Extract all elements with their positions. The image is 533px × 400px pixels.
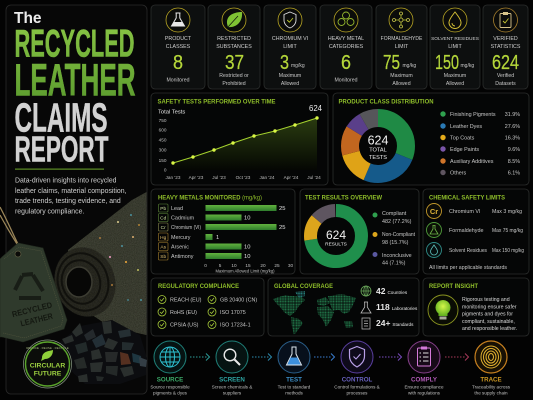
legend — [372, 211, 415, 266]
bar values: 10 — [244, 245, 250, 251]
step: comply — [404, 341, 444, 396]
panel: safety tests over time: Total Tests — [158, 110, 185, 116]
legend: 27.6% — [505, 124, 520, 130]
stat card: formaldehyde limit: LIMIT — [395, 44, 409, 50]
insight text: and responsible leather. — [462, 326, 517, 332]
accent rule — [15, 169, 104, 170]
metal element badges — [158, 204, 168, 260]
panel: heavy metals monitored — [151, 189, 295, 274]
step: screen — [212, 341, 252, 396]
icon: molecule hexagons — [334, 8, 358, 32]
legend: 9.6% — [508, 147, 520, 153]
icon: checklist — [408, 341, 440, 373]
x axis labels: Apr '23 — [189, 175, 204, 180]
icon: globe — [154, 341, 186, 373]
arrow: screen to test — [252, 354, 272, 360]
description text: leather claims, material composition, — [15, 188, 127, 195]
metal element badges: As — [160, 244, 167, 250]
icon: flask — [166, 8, 190, 32]
axis labels — [204, 263, 293, 274]
limit rows: Max 75 mg/kg — [492, 228, 523, 234]
stat card: restricted substances: RESTRICTED — [217, 36, 251, 42]
icon: document — [362, 318, 370, 329]
metal names: Lead — [171, 206, 183, 212]
stat card: solvent residues limit: Maximum — [444, 73, 466, 79]
badge: circular future: REDUCE · REUSE · RECYCLE — [26, 346, 69, 350]
icon: light bulb — [428, 295, 458, 325]
legend: Non-Compliant — [382, 232, 415, 238]
stat card: chromium VI limit: mg/kg — [291, 63, 305, 69]
stat card: chromium VI limit: Maximum — [279, 73, 301, 79]
arrow: control to comply — [379, 354, 402, 360]
donut center label: TESTS — [369, 155, 387, 161]
bar values: 10 — [244, 216, 250, 222]
bar values: 25 — [279, 206, 285, 212]
insight text: monitoring ensure safer — [462, 304, 517, 310]
legend: 98 (15.7%) — [382, 240, 409, 246]
metal names: Mercury — [171, 235, 191, 241]
metal element badges: Hg — [160, 235, 167, 241]
standards list — [170, 298, 257, 328]
stat: countries: 42 — [376, 286, 386, 296]
stat card: product classes: CLASSES — [166, 44, 191, 50]
panel: chemical safety limits: CHEMICAL SAFETY LIMITS — [429, 194, 505, 202]
standards list: GB 20400 (CN) — [220, 298, 257, 304]
axis labels: 20 — [260, 263, 266, 268]
stat card: verified statistics: 624 — [492, 52, 519, 74]
standards list: ISO 17075 — [220, 310, 246, 316]
stat card: solvent residues limit: 150 — [435, 52, 459, 74]
title: The: The — [14, 10, 42, 27]
stat card: restricted substances — [208, 5, 260, 89]
step: comply: COMPLY — [411, 376, 438, 384]
metal element badges: Sb — [160, 254, 166, 260]
step: screen: Screen chemicals & — [212, 384, 252, 390]
icon: fingerprint — [475, 341, 507, 373]
stat: laboratories: 118 — [376, 302, 390, 312]
step: test: Test to standard — [278, 384, 311, 390]
x axis labels: Jan '24 — [260, 175, 275, 180]
world map — [273, 291, 356, 335]
step: trace: TRACE — [480, 376, 502, 384]
x axis labels: Jan '23 — [166, 175, 181, 180]
stat: standards: Standards — [392, 322, 414, 327]
legend: Leather Dyes — [450, 124, 482, 130]
legend: 16.3% — [505, 136, 520, 142]
step: source: SOURCE — [157, 376, 183, 384]
stat card: chromium VI limit: Allowed — [281, 81, 299, 87]
icon: formaldehyde flask — [426, 222, 442, 238]
stat card: product classes — [151, 5, 205, 89]
stat card: restricted substances: 37 — [225, 52, 244, 74]
stat card: chromium VI limit: LIMIT — [283, 44, 298, 50]
step: source — [150, 341, 190, 396]
stat card: verified statistics: STATISTICS — [491, 44, 521, 50]
stat: countries: Countries — [387, 290, 408, 295]
step: test: methods — [285, 390, 304, 396]
stat card: restricted substances: Prohibited — [222, 81, 246, 87]
metal element badges: Cr — [161, 225, 166, 231]
panel: product class distribution: PRODUCT CLASS DISTRIBUTION — [338, 98, 434, 106]
axis labels: 5 — [219, 263, 222, 268]
legend: Edge Paints — [450, 147, 479, 153]
bar values: 10 — [244, 254, 250, 260]
insight text: Rigorous testing and — [462, 297, 510, 303]
tag text — [11, 300, 56, 330]
axis labels: 25 — [274, 263, 280, 268]
icon: globe — [361, 286, 371, 296]
stat card: formaldehyde limit — [376, 5, 427, 89]
metal element badges: Pb — [160, 206, 166, 212]
panel: global coverage — [268, 278, 419, 336]
x axis labels — [166, 175, 321, 180]
panel: test results overview — [300, 189, 419, 274]
stat card: verified statistics — [483, 5, 528, 89]
icon: droplet — [443, 8, 467, 32]
stat card: restricted substances: Restricted or — [219, 73, 249, 79]
y axis labels: 600 — [159, 128, 167, 132]
legend: Others — [450, 170, 466, 176]
limit rows: Formaldehyde — [449, 228, 483, 234]
title: Recycled Leather — [14, 22, 136, 106]
stat card: formaldehyde limit: mg/kg — [402, 63, 416, 69]
x axis labels: Jul '23 — [212, 175, 226, 180]
donut center label: RESULTS — [325, 242, 347, 248]
donut center label — [325, 228, 347, 248]
panel: regulatory compliance — [151, 278, 264, 336]
bar values: 25 — [279, 225, 285, 231]
insight text: compliant, sustainable, — [462, 319, 515, 325]
standards list: RoHS (EU) — [170, 310, 197, 316]
stat card: formaldehyde limit: Maximum — [390, 73, 413, 79]
limit rows: Max 150 mg/kg — [492, 248, 524, 254]
stat card: solvent residues limit: SOLVENT RESIDUES — [431, 36, 479, 42]
panel: test results overview: TEST RESULTS OVERVIEW — [305, 194, 383, 202]
standards list: ISO 17234-1 — [220, 322, 251, 328]
stat card: chromium VI limit — [264, 5, 316, 89]
axis labels: 30 — [288, 263, 293, 268]
panel: product class distribution — [333, 93, 529, 185]
stat card: solvent residues limit: LIMIT — [448, 44, 463, 50]
icon: solvent droplet — [426, 242, 442, 258]
description text: Data-driven insights into recycled — [15, 178, 117, 184]
icon: flask — [278, 341, 310, 373]
icon: shield — [278, 8, 302, 32]
legend — [440, 111, 520, 176]
metal names: Chromium (VI) — [171, 225, 201, 231]
stat card: product classes: Monitored — [166, 78, 190, 84]
title: Claims Report — [14, 94, 109, 170]
standards list: REACH (EU) — [170, 298, 202, 304]
legend: Top Coats — [450, 136, 475, 142]
arrow: test to control — [314, 354, 334, 360]
icon: formaldehyde molecule — [389, 8, 413, 32]
stat card: product classes: 8 — [173, 52, 183, 74]
step: control: CONTROL — [342, 376, 373, 384]
compliance checks — [158, 296, 216, 328]
line chart — [171, 116, 319, 170]
icon: magnifier — [216, 341, 248, 373]
y axis labels — [159, 118, 167, 172]
title: Claims Report: CLAIMS — [14, 94, 108, 140]
panel: report insight — [423, 278, 529, 336]
arrow: source to screen — [190, 354, 210, 360]
stat card: heavy metal categories — [320, 5, 372, 89]
title: Recycled Leather: RECYCLED — [14, 22, 134, 66]
stat card: product classes: PRODUCT — [165, 36, 192, 42]
description text: regulatory compliance. — [15, 208, 84, 216]
step: comply: Ensure compliance — [404, 384, 444, 390]
badge: circular future — [24, 340, 72, 388]
y axis labels: 450 — [159, 138, 167, 142]
limit rows: Solvent Residues — [449, 248, 487, 254]
step: comply: with regulations — [408, 390, 441, 396]
bar values: 1 — [216, 235, 219, 241]
legend: Inconclusive — [382, 253, 412, 259]
donut center label: TOTAL — [369, 148, 387, 154]
legend: Auxiliary Additives — [450, 159, 494, 165]
donut chart — [350, 118, 406, 174]
axis labels: 10 — [231, 263, 237, 268]
panel: report cover — [0, 5, 147, 394]
bar values — [216, 206, 285, 260]
step: source: pigments & dyes — [153, 390, 188, 396]
stat: laboratories: Laboratories — [392, 306, 418, 311]
stat card: restricted substances: SUBSTANCES — [216, 44, 252, 50]
step: trace: Traceability across — [472, 384, 511, 390]
stat card: formaldehyde limit: FORMALDEHYDE — [381, 36, 423, 42]
y axis labels: 0 — [164, 168, 167, 172]
description text: trade trends, testing evidence, and — [15, 198, 121, 205]
icon: laboratory flask — [361, 302, 371, 313]
icon: leaf — [222, 8, 246, 32]
step: control: processes — [347, 390, 368, 396]
step: test — [278, 341, 311, 396]
panel: heavy metals monitored: HEAVY METALS MONITORED (mg/kg) — [158, 194, 262, 202]
bar chart — [206, 205, 276, 259]
legend: Finishing Pigments — [450, 112, 496, 118]
stat card: solvent residues limit: mg/kg — [460, 63, 474, 69]
stat: standards: 24+ — [376, 318, 390, 328]
legend: 6.1% — [508, 170, 520, 176]
axis labels: 15 — [245, 263, 251, 268]
title: Recycled Leather: LEATHER — [14, 54, 136, 106]
y axis labels: 750 — [159, 118, 167, 123]
axis labels: 0 — [204, 263, 207, 268]
limit rows: Max 3 mg/kg — [492, 209, 522, 215]
donut center label — [368, 134, 388, 161]
icon: chromium: Cr — [430, 207, 438, 216]
metal names: Cadmium — [171, 216, 195, 222]
metal names: Antimony — [171, 254, 194, 260]
step: screen: suppliers — [223, 390, 242, 396]
stat card: verified statistics: Verified — [497, 73, 514, 79]
panel: safety tests over time: SAFETY TESTS PERFORMED OVER TIME — [158, 98, 276, 106]
x axis labels: Oct '23 — [236, 175, 251, 180]
legend: 482 (77.2%) — [382, 219, 412, 225]
insight text: pigments and dyes for — [462, 312, 513, 318]
step: control: Control formulations & — [334, 384, 380, 390]
metal names — [171, 206, 201, 260]
legend: 44 (7.1%) — [382, 260, 406, 266]
limit rows: All limits per applicable standards — [429, 265, 507, 271]
panel: safety tests over time: 624 — [309, 104, 323, 113]
limit rows: Chromium VI — [449, 209, 480, 215]
stat card: formaldehyde limit: 75 — [383, 52, 400, 74]
metal element badges: Cd — [160, 215, 167, 221]
legend: 31.9% — [505, 112, 520, 118]
legend: Compliant — [382, 211, 407, 217]
step: source: Source responsible — [150, 384, 190, 390]
panel: chemical safety limits — [423, 189, 529, 274]
x axis labels: Jul '24 — [307, 175, 321, 180]
step: screen: SCREEN — [219, 376, 245, 384]
step: control — [334, 341, 380, 396]
donut center label: 624 — [326, 228, 346, 242]
y axis labels: 150 — [159, 158, 167, 163]
stat card: solvent residues limit — [430, 5, 480, 89]
panel: global coverage: GLOBAL COVERAGE — [274, 283, 333, 290]
axis labels: Maximum Allowed Limit (mg/kg) — [215, 268, 275, 274]
icon: recycle symbol — [15, 274, 43, 298]
tag text: LEATHER — [20, 312, 54, 328]
title: Claims Report: REPORT — [14, 128, 109, 170]
panel: safety tests over time — [151, 93, 328, 185]
stat card: chromium VI limit: 3 — [280, 52, 289, 74]
image: recycled leather roll — [46, 192, 146, 335]
badge: circular future: FUTURE — [34, 370, 62, 378]
metal names: Arsenic — [171, 244, 189, 250]
step: trace: the supply chain — [474, 390, 508, 396]
stat card: heavy metal categories: CATEGORIES — [329, 44, 364, 50]
stat card: solvent residues limit: Allowed — [446, 81, 464, 87]
stat card: heavy metal categories: 6 — [341, 52, 351, 74]
stat card: heavy metal categories: Monitored — [334, 78, 358, 84]
y axis labels: 300 — [159, 148, 167, 152]
icon: clipboard — [494, 8, 518, 32]
tag text: RECYCLED — [11, 300, 53, 319]
stat card: formaldehyde limit: Allowed — [392, 81, 411, 87]
badge: circular future: CIRCULAR — [30, 362, 65, 370]
icon: shield — [341, 341, 373, 373]
donut center label: 624 — [368, 134, 388, 148]
image: leather scrap pile — [60, 320, 147, 384]
donut chart — [310, 210, 362, 262]
stat card: verified statistics: VERIFIED — [493, 36, 518, 42]
arrow: comply to trace — [445, 354, 468, 360]
x axis labels: Apr '24 — [284, 175, 299, 180]
legend: 8.5% — [508, 159, 520, 165]
limit rows — [429, 209, 524, 271]
step: test: TEST — [286, 376, 302, 384]
stat card: chromium VI limit: CHROMIUM VI — [272, 36, 308, 42]
image: leather tag — [0, 207, 67, 342]
panel: regulatory compliance: REGULATORY COMPLIANCE — [158, 283, 239, 290]
standards list: CPSIA (US) — [170, 322, 199, 328]
stat card: heavy metal categories: HEAVY METAL — [328, 36, 364, 42]
step: trace — [472, 341, 511, 396]
stat card: verified statistics: Datasets — [495, 81, 516, 87]
panel: report insight: REPORT INSIGHT — [429, 283, 479, 290]
